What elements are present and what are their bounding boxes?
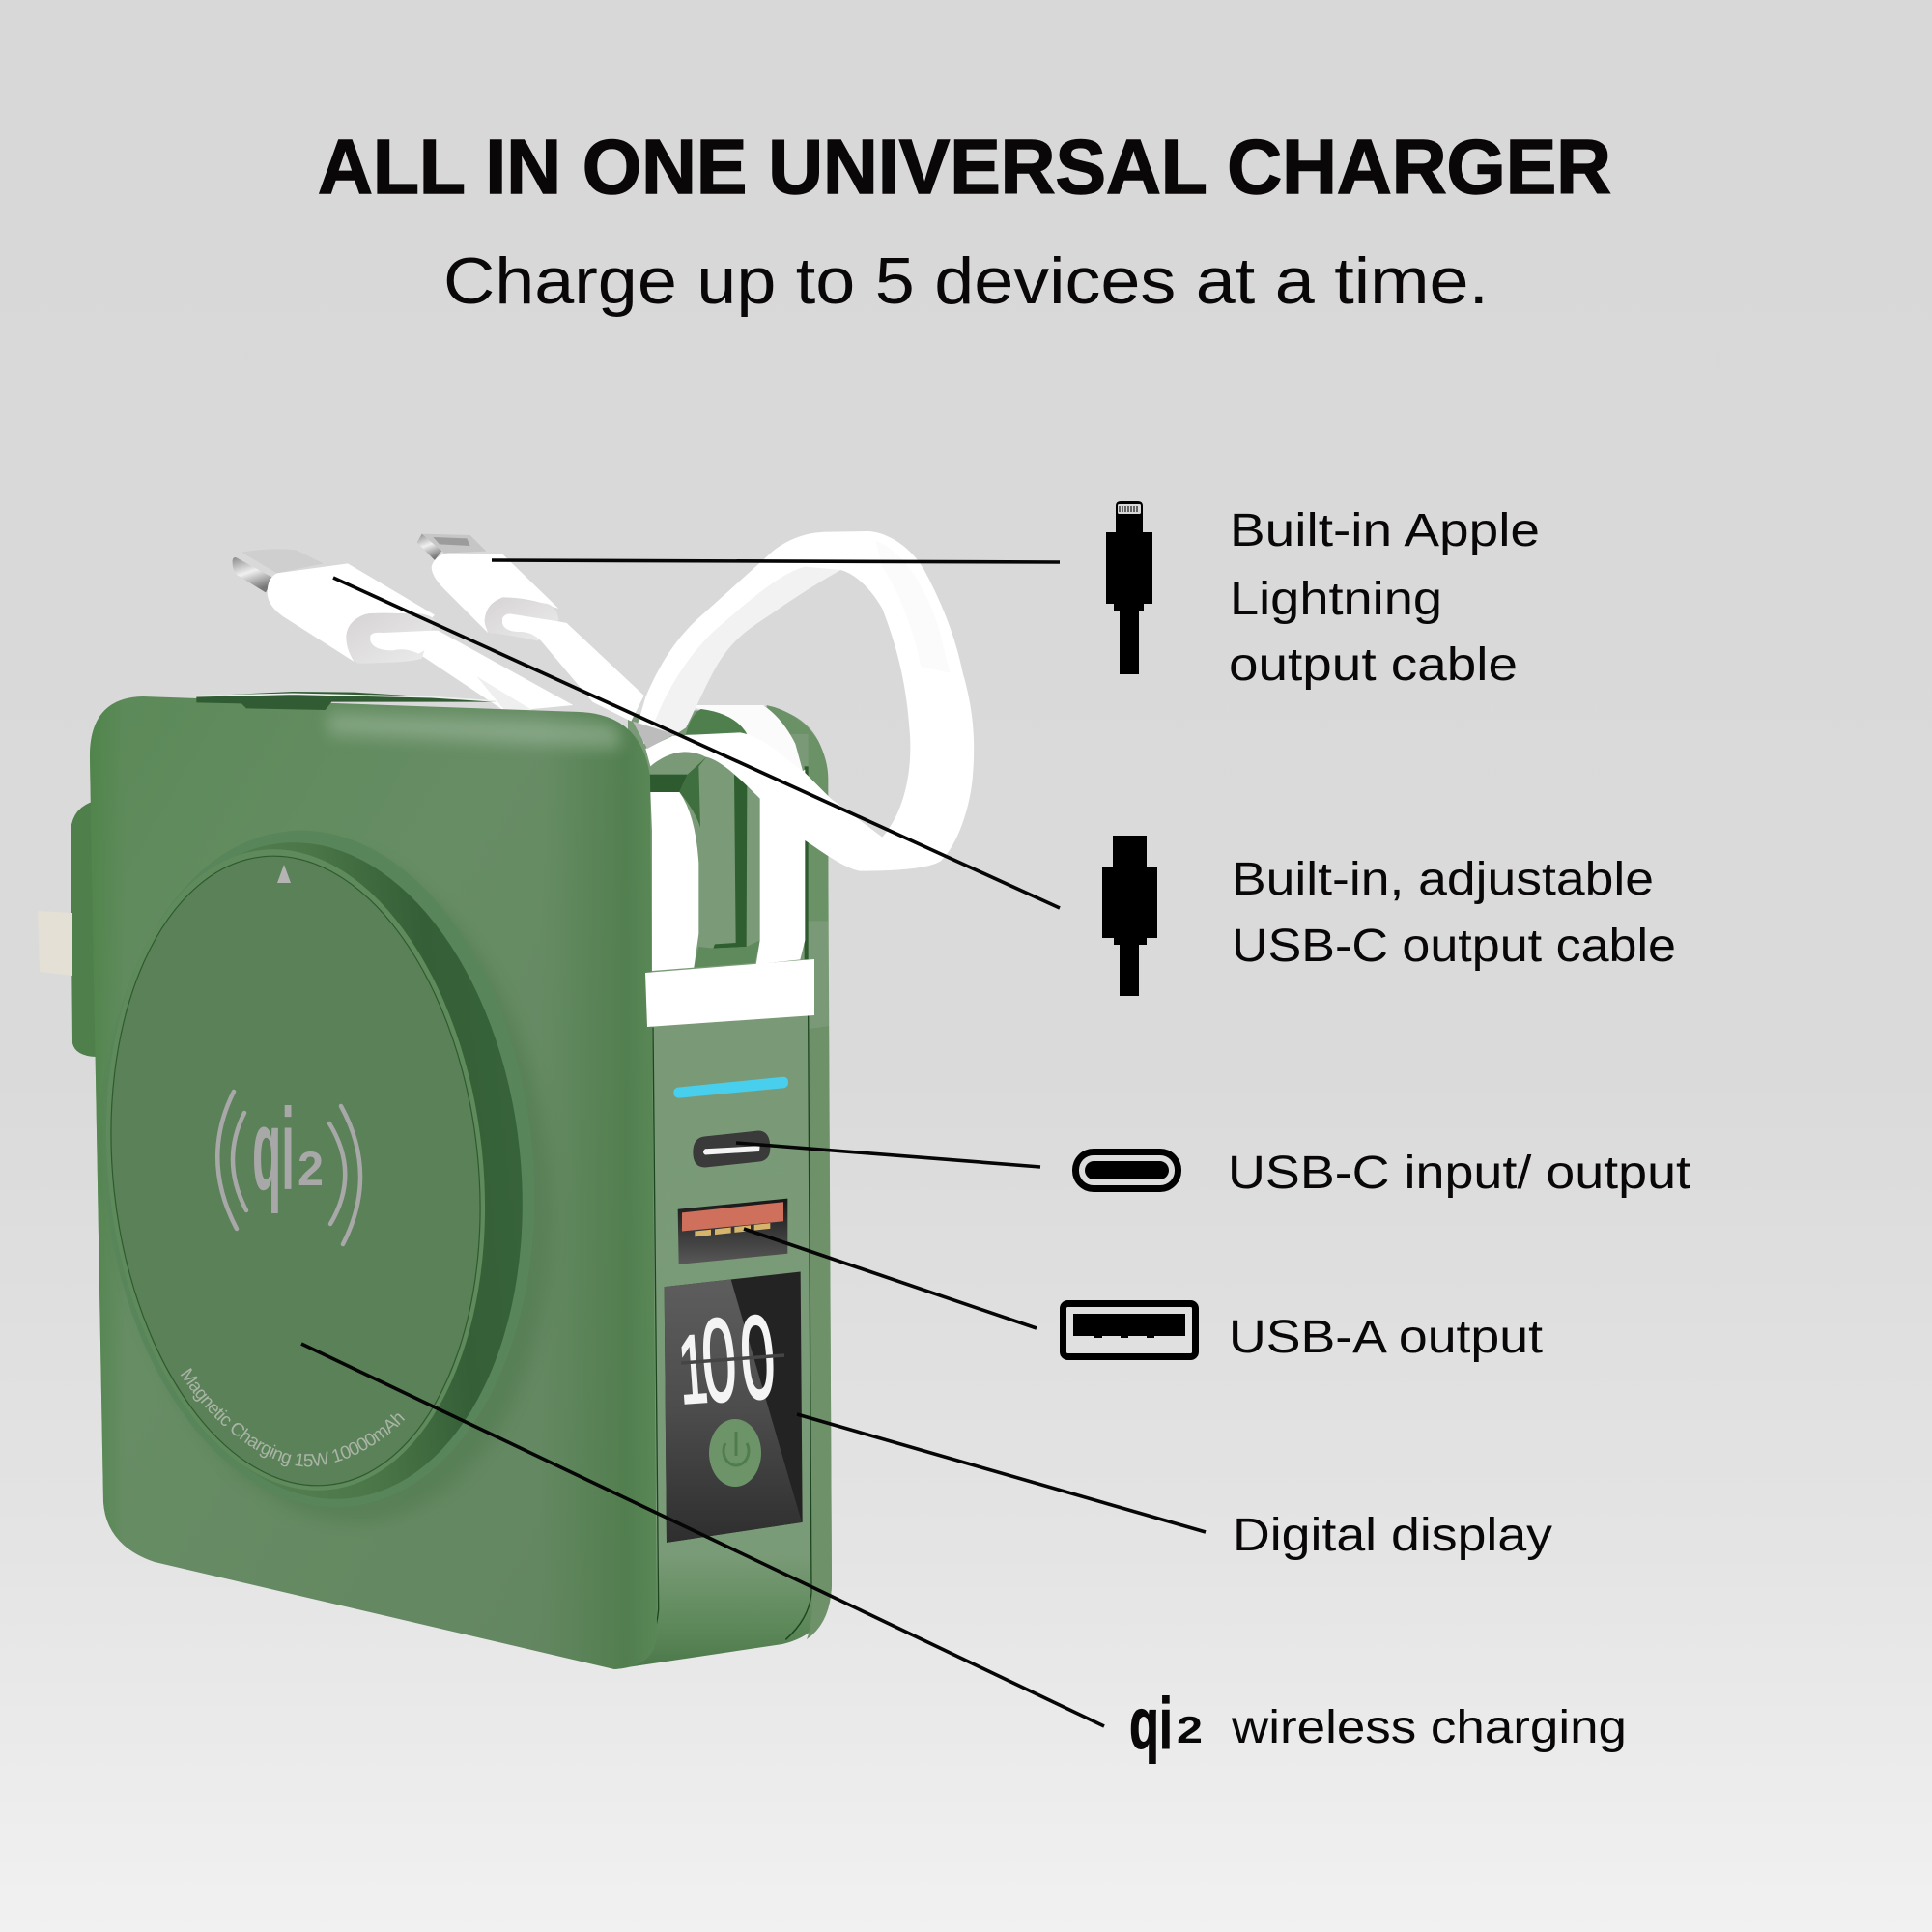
plug prong <box>38 911 72 976</box>
display segment gaps <box>681 1355 784 1363</box>
label: USB-C cable: Built-in, adjustable <box>1232 854 1654 905</box>
raised outer ring <box>75 812 562 1525</box>
label: Lightning <box>1229 505 1540 691</box>
qi2 logo on disc: 2 <box>298 1142 324 1196</box>
ring shadow band <box>76 822 554 1520</box>
label: digital display: Digital display <box>1233 1510 1552 1561</box>
label: Lightning: Lightning <box>1230 574 1442 625</box>
retractable cable straps <box>370 613 644 722</box>
top recess <box>196 692 496 710</box>
label: wireless charging: wireless charging <box>1231 1702 1627 1753</box>
USB-C connector <box>233 549 447 664</box>
power button <box>709 1419 761 1487</box>
icon: qi2 logo: 2 <box>1177 1710 1203 1751</box>
label: USB-A port: USB-A output <box>1229 1312 1543 1363</box>
label: USB-C port: USB-C input/ output <box>1228 1148 1690 1199</box>
cable bay upper corner <box>766 705 828 921</box>
title: ALL IN ONE UNIVERSAL CHARGER <box>318 124 1611 210</box>
display reading: 1 <box>675 1315 711 1424</box>
product: power bank <box>38 531 1012 1685</box>
qi2 logo on disc: qi <box>252 1085 295 1214</box>
front shading <box>81 676 662 1681</box>
white retention band <box>645 959 814 1027</box>
USB-A port <box>678 1199 787 1264</box>
leader lines <box>301 560 1206 1726</box>
icon: Lightning cable <box>1106 501 1152 674</box>
side panel details <box>628 1014 811 1665</box>
label: Lightning: Built-in Apple <box>1230 505 1540 556</box>
subtitle: Charge up to 5 devices at a time. <box>443 244 1489 318</box>
icon: USB-C port <box>1072 1149 1181 1192</box>
disc engraved text: Magnetic Charging 15W 10000mAh <box>181 1368 405 1466</box>
icon: qi2 logo: qi <box>1129 1683 1173 1764</box>
plug tab on left side <box>71 801 96 1057</box>
icon: USB-A port <box>1063 1304 1196 1356</box>
label: USB-C cable <box>1232 854 1676 972</box>
display reading <box>674 1291 780 1429</box>
icon: USB-C cable <box>1102 836 1157 996</box>
label: Lightning: output cable <box>1229 639 1518 691</box>
display reading: 0 <box>736 1291 780 1425</box>
disc arrow marker <box>277 865 291 883</box>
looped flat cable <box>633 531 974 871</box>
cable bay <box>638 734 809 973</box>
Lightning connector <box>417 534 582 647</box>
wireless disc <box>81 838 510 1504</box>
front face <box>90 696 657 1669</box>
upper strap and arc in bay <box>686 705 805 780</box>
label: USB-C cable: USB-C output cable <box>1232 921 1676 972</box>
side right strip <box>807 1026 832 1639</box>
USB-C port <box>693 1131 770 1167</box>
ring lip <box>75 831 516 1509</box>
side face <box>614 706 832 1669</box>
digital display <box>665 1272 803 1543</box>
LED bar <box>673 1077 788 1098</box>
display reading: 0 <box>697 1293 741 1427</box>
qi2 logo on disc <box>217 1085 360 1244</box>
